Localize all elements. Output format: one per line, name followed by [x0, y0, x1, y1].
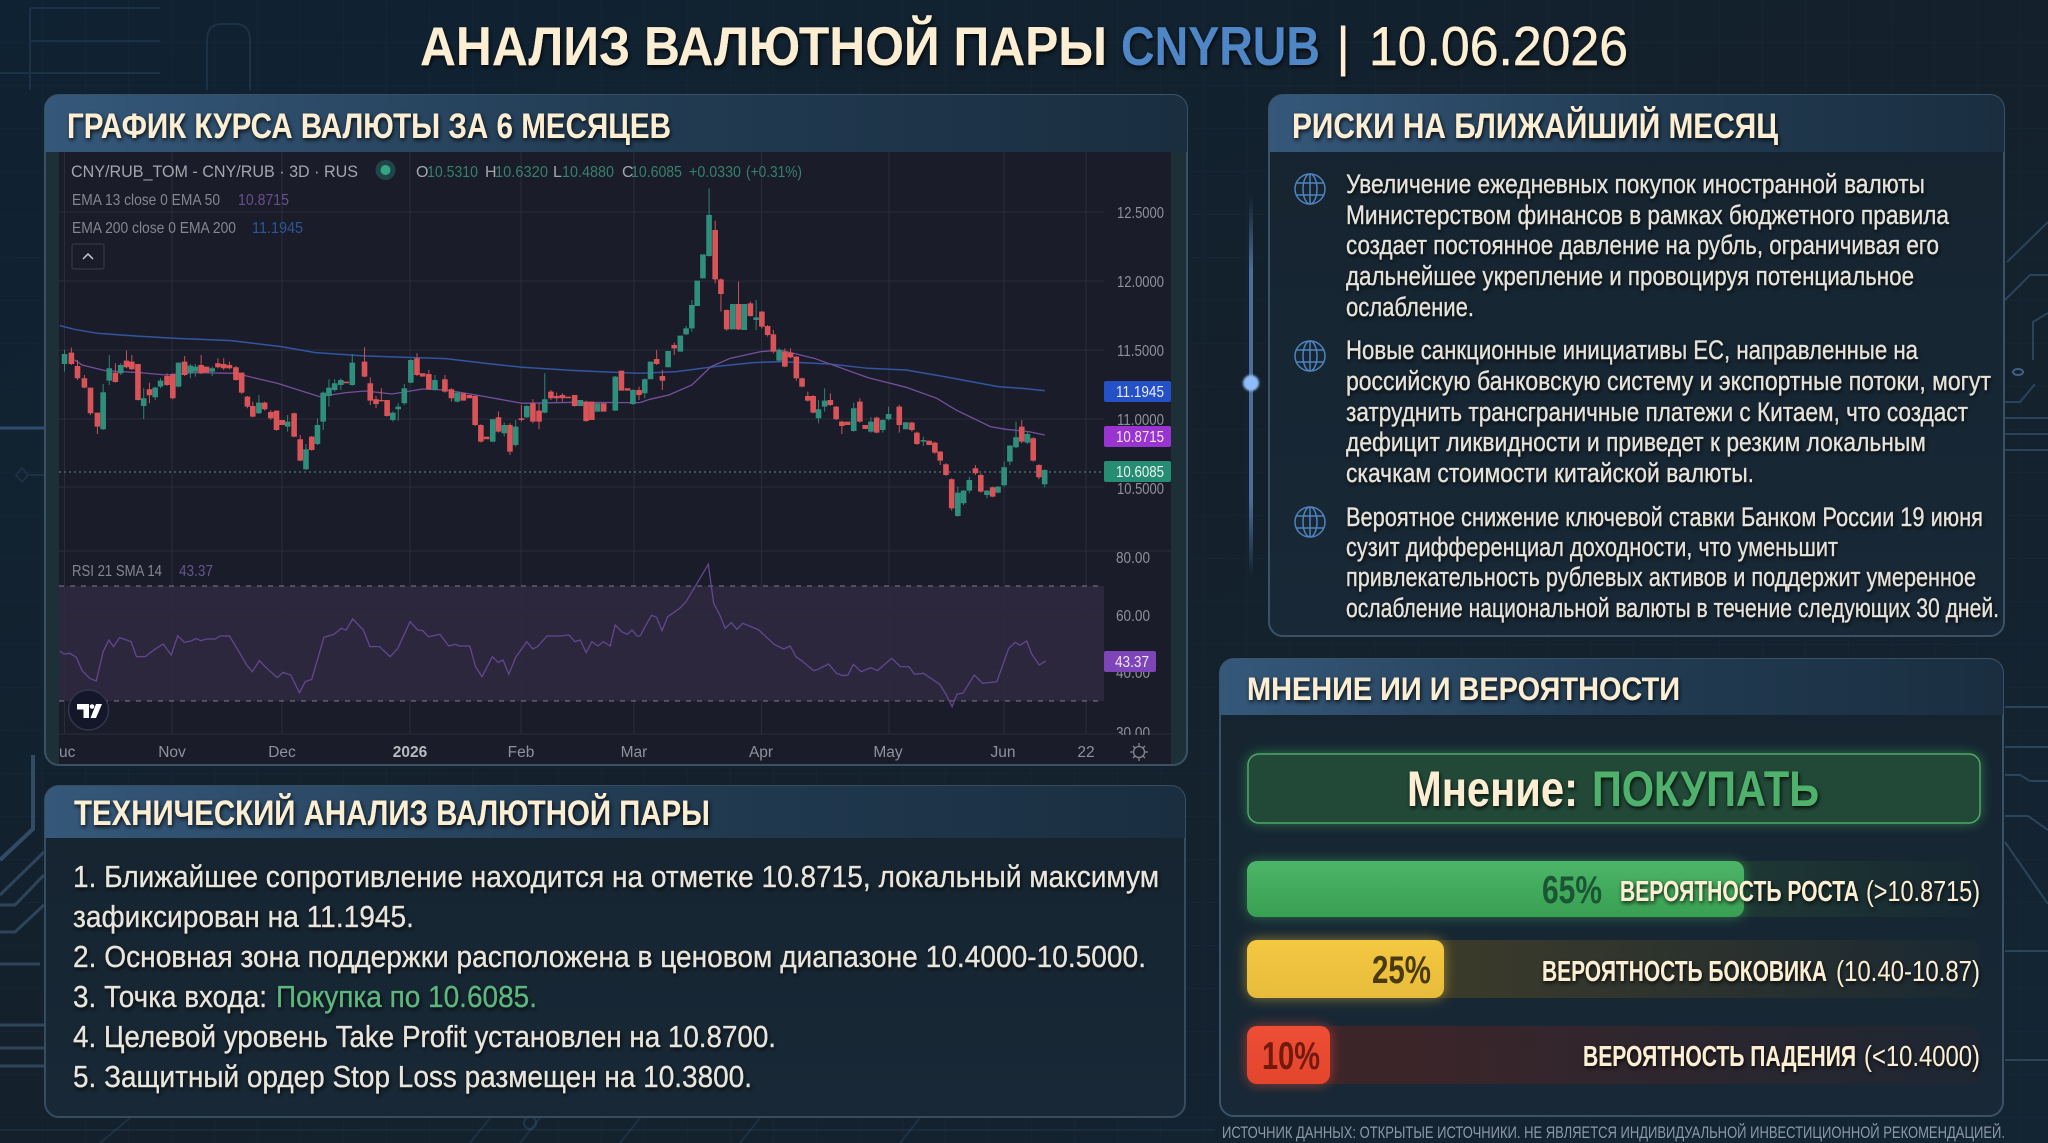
chart legend: symbol	[71, 160, 802, 181]
text: risk 2: Новые санкционные инициативы ЕС, направленные на	[1346, 335, 1919, 365]
time axis: Mar	[621, 744, 647, 761]
candle wicks red	[71, 347, 586, 461]
text: technical list: 1. Ближайшее сопротивление находится на отметке 10.8715, локальный максимум	[73, 859, 1159, 894]
panel header: ai opinion	[1220, 659, 2003, 715]
candle wicks green	[64, 350, 545, 470]
title	[420, 14, 1628, 77]
rsi overbought oversold band	[59, 586, 1104, 701]
text: technical list: 3. Точка входа:	[73, 979, 267, 1014]
icon: settings gear	[1130, 743, 1148, 761]
text: technical list: Покупка по 10.6085.	[276, 979, 537, 1014]
bar: growth 65%: 65%	[1542, 869, 1602, 912]
chart legend: symbol: CNY/RUB_TOM - CNY/RUB · 3D · RUS	[71, 162, 358, 181]
opinion box: ПОКУПАТЬ	[1592, 761, 1819, 817]
text: technical list: 4. Целевой уровень Take Profit установлен на 10.8700.	[73, 1019, 776, 1054]
rsi axis labels: 60.00	[1116, 608, 1150, 625]
bar: growth 65%	[1247, 861, 1980, 917]
heading: risks: РИСКИ НА БЛИЖАЙШИЙ МЕСЯЦ	[1292, 106, 1778, 146]
price axis labels: 11.0000	[1117, 412, 1164, 429]
chart legend: ema 200: EMA 200 close 0 EMA 200	[72, 220, 236, 237]
title: 10.06.2026	[1369, 15, 1628, 77]
title: |	[1336, 15, 1350, 77]
chart canvas	[59, 152, 1171, 764]
heading: technical analysis: ТЕХНИЧЕСКИЙ АНАЛИЗ ВАЛЮТНОЙ ПАРЫ	[74, 793, 710, 833]
text: risk 1: Министерством финансов в рамках бюджетного правила	[1346, 200, 1950, 230]
text: risk 2: дефицит ликвидности и приведет к резким локальным	[1346, 427, 1926, 457]
time axis: uc	[59, 744, 76, 761]
text: risk 3	[1346, 502, 1999, 623]
chart legend: symbol: H	[485, 164, 497, 181]
text: technical list: зафиксирован на 11.1945.	[73, 899, 414, 934]
panel: risks	[1269, 95, 2004, 636]
ema and candles, first section	[60, 326, 640, 470]
rsi axis labels	[1110, 550, 1160, 743]
chart legend: symbol: +0.0330	[689, 164, 741, 181]
chart legend: symbol: L	[553, 164, 562, 181]
candle wicks	[615, 188, 1045, 517]
price axis labels: 11.5000	[1117, 343, 1164, 360]
chart legend: symbol: 10.6320	[495, 164, 548, 181]
rsi badge: 43.37	[1115, 654, 1149, 671]
rsi badge	[1104, 651, 1156, 672]
icon: globe 1	[1295, 174, 1325, 204]
rsi levels	[59, 586, 1104, 701]
ema and candles, second section	[615, 188, 1045, 517]
bar: growth 65%: (>10.8715)	[1866, 876, 1980, 908]
time axis	[59, 744, 1095, 761]
time axis: Jun	[990, 744, 1016, 761]
rsi line left	[60, 619, 640, 693]
rsi legend: RSI 21 SMA 14	[72, 563, 162, 580]
tradingview logo	[68, 690, 108, 730]
chart legend: ema 50: 10.8715	[238, 192, 289, 209]
bar: growth 65%: ВЕРОЯТНОСТЬ РОСТА	[1620, 876, 1859, 908]
text: risk 1: Увеличение ежедневных покупок иностранной валюты	[1346, 169, 1925, 199]
bar: fall 10%: (<10.4000)	[1864, 1041, 1980, 1073]
panel: chart	[45, 95, 1187, 765]
chart legend: symbol: 10.5310	[427, 164, 478, 181]
icon: globe 2	[1295, 341, 1325, 371]
chart legend: symbol: 10.4880	[562, 164, 614, 181]
price badge ema 50	[1104, 426, 1171, 447]
chart legend: symbol: O	[416, 164, 428, 181]
text: risk 2	[1346, 335, 1991, 488]
price badge last: 10.6085	[1116, 464, 1164, 481]
bar: sideways 25%: ВЕРОЯТНОСТЬ БОКОВИКА	[1542, 956, 1827, 988]
ema 50 left	[74, 360, 640, 403]
time axis: May	[873, 744, 903, 761]
text: technical list: 5. Защитный ордер Stop Loss размещен на 10.3800.	[73, 1059, 752, 1094]
price axis labels: 10.5000	[1117, 481, 1164, 498]
price axis labels: 12.0000	[1117, 274, 1164, 291]
bar: fall 10%: ВЕРОЯТНОСТЬ ПАДЕНИЯ	[1583, 1041, 1856, 1073]
panel header: risks	[1269, 95, 2004, 152]
price badge last	[1104, 461, 1171, 482]
heading: chart: ГРАФИК КУРСА ВАЛЮТЫ ЗА 6 МЕСЯЦЕВ	[67, 107, 671, 146]
price badge ema 200	[1104, 381, 1171, 402]
rsi legend: 43.37	[179, 563, 213, 580]
ema 200 right	[640, 362, 1045, 391]
candle bodies green	[64, 354, 598, 469]
opinion box	[1248, 754, 1980, 823]
price badge ema 50: 10.8715	[1116, 429, 1164, 446]
text: technical list: 2. Основная зона поддержки расположена в ценовом диапазоне 10.4000-10.5000.	[73, 939, 1146, 974]
candle bodies	[615, 215, 1045, 516]
bar: sideways 25%: 25%	[1372, 949, 1431, 992]
time axis: 2026	[393, 744, 428, 761]
current price line	[59, 471, 1104, 473]
chart legend: ema 50: EMA 13 close 0 EMA 50	[72, 192, 220, 209]
bar: fall 10%	[1247, 1026, 1980, 1084]
chart legend: symbol: 10.6085	[631, 164, 682, 181]
chart legend: symbol: (+0.31%)	[746, 164, 802, 181]
time axis: 22	[1077, 744, 1095, 761]
time axis: Nov	[158, 744, 186, 761]
rsi axis labels: 40.00	[1116, 665, 1150, 682]
icon: globe 3	[1295, 507, 1325, 537]
text: risk 1: ослабление.	[1346, 292, 1474, 322]
text: technical list	[73, 859, 1159, 1094]
ema 50 right	[640, 350, 1045, 435]
price badge ema 200: 11.1945	[1116, 384, 1164, 401]
rsi axis labels: 80.00	[1116, 550, 1150, 567]
title: CNYRUB	[1121, 15, 1320, 77]
bar: sideways 25%: (10.40-10.87)	[1836, 956, 1980, 988]
ema 200 left	[60, 326, 640, 373]
rsi line right	[640, 564, 1046, 707]
text: risk 2: скачкам стоимости китайской валюты.	[1346, 458, 1754, 488]
rsi axis labels: 30.00	[1116, 725, 1150, 742]
title: АНАЛИЗ ВАЛЮТНОЙ ПАРЫ	[420, 14, 1107, 77]
heading: ai opinion: МНЕНИЕ ИИ И ВЕРОЯТНОСТИ	[1247, 671, 1680, 707]
panel header: technical analysis	[45, 786, 1185, 838]
panel header: chart	[45, 95, 1187, 152]
text: risk 1	[1346, 169, 1950, 322]
candle bodies red	[71, 353, 604, 461]
opinion box: Мнение:	[1407, 761, 1578, 817]
bar: fall 10%: 10%	[1262, 1035, 1320, 1078]
time axis: Apr	[749, 744, 773, 761]
text: risk 3: сузит дифференциал доходности, что уменьшит	[1346, 532, 1838, 562]
panel: ai opinion	[1220, 659, 2003, 1116]
collapse button	[72, 244, 104, 269]
price axis labels: 12.5000	[1117, 205, 1164, 222]
chart legend: ema 200: 11.1945	[252, 220, 303, 237]
bar: sideways 25%	[1247, 940, 1980, 998]
chart grid	[59, 152, 1171, 734]
panel: technical analysis	[45, 786, 1185, 1117]
text: risk 1: дальнейшее укрепление и провоцируя потенциальное	[1346, 261, 1914, 291]
text: risk 1: создает постоянное давление на рубль, ограничивая его	[1346, 230, 1939, 260]
price axis labels	[1117, 205, 1164, 498]
decorative connector with dot	[1243, 196, 1259, 576]
chart legend: symbol: C	[622, 164, 634, 181]
time axis: Feb	[508, 744, 534, 761]
time axis: Dec	[268, 744, 296, 761]
